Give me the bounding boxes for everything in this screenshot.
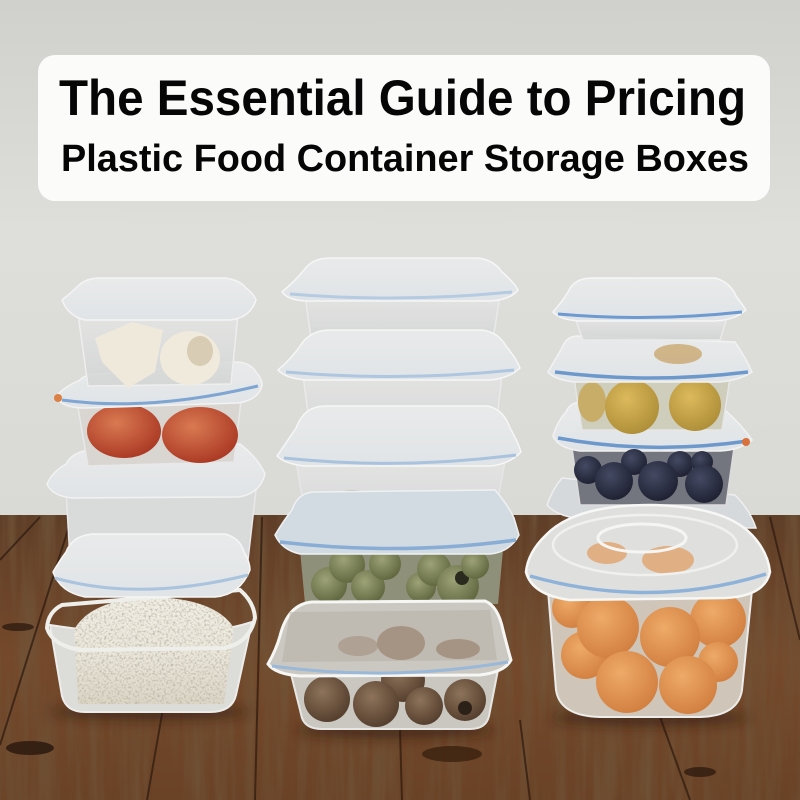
center stack: second empty container [278, 330, 520, 444]
title line 2: Plastic Food Container Storage Boxes [61, 138, 749, 180]
left stack: container with red fruit [54, 362, 262, 466]
center stack: third container [277, 406, 521, 534]
title banner [38, 55, 770, 201]
background: wooden table [0, 515, 800, 800]
food: rice [74, 597, 234, 704]
front left: container with rice [47, 590, 255, 712]
food: white wedge [95, 322, 163, 388]
fruit: red left [87, 404, 161, 458]
contact shadows on the table [50, 704, 750, 738]
front center: container with brown nuts [268, 601, 511, 729]
right stack: container with dark berries [553, 402, 752, 505]
background: wall [0, 0, 800, 518]
center stack: top empty container [282, 258, 518, 345]
front left: empty lid container [53, 534, 250, 597]
left stack: top container with white food [62, 278, 256, 388]
front right: round container with oranges [526, 505, 770, 717]
center stack: container with olives [275, 490, 519, 607]
food: white round slice [160, 331, 220, 385]
right stack: top empty container [553, 278, 746, 340]
left stack: large bottom container [47, 444, 265, 560]
title line 1: The Essential Guide to Pricing [59, 70, 746, 126]
right stack: container with yellow fruit [548, 336, 752, 434]
fruit: red right [162, 407, 238, 463]
right stack: lower hidden container lid [547, 478, 756, 528]
